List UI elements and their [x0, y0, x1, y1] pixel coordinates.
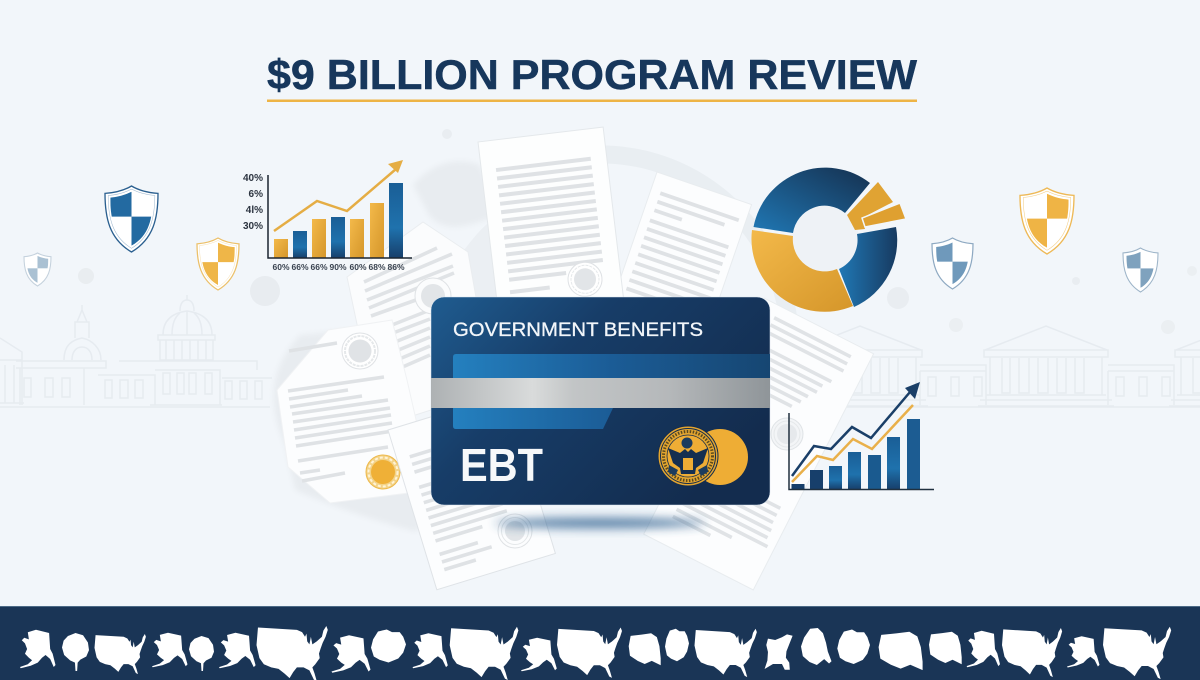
x axis labels: 60%	[349, 262, 367, 272]
donut segment: right blue	[839, 227, 897, 307]
y axis labels: 40%	[243, 173, 263, 184]
bar chart: left with rising arrow	[243, 160, 412, 272]
x axis labels: 68%	[368, 262, 386, 272]
donut segment: large gold	[751, 230, 853, 312]
right skyline with temples	[792, 326, 1200, 407]
shield: gold left	[197, 238, 239, 290]
y axis labels: 4l%	[246, 205, 263, 216]
card shadow	[495, 518, 705, 528]
document: left middle	[347, 222, 480, 420]
y axis labels	[243, 173, 263, 232]
shield: gold right	[1020, 188, 1074, 254]
title: $9 BILLION PROGRAM REVIEW	[267, 51, 917, 98]
grey stamp	[342, 333, 378, 369]
shield: small blue far right	[1123, 248, 1158, 292]
bars	[792, 419, 920, 490]
document: lower right	[644, 298, 874, 590]
donut hole	[791, 206, 859, 274]
axes	[789, 413, 934, 490]
card silver band	[431, 378, 770, 408]
shield: blue right	[932, 238, 973, 289]
bar chart: right with rising arrow	[789, 382, 934, 490]
EBT card	[431, 297, 770, 505]
card label EBT: EBT	[460, 439, 543, 491]
title underline	[267, 100, 917, 102]
bars	[274, 183, 403, 258]
document: top centre	[478, 127, 627, 346]
y axis labels: 30%	[243, 221, 263, 232]
donut wedge: gold exploded	[862, 203, 906, 227]
lower right grey stamp	[771, 418, 803, 450]
x axis labels: 90%	[329, 262, 347, 272]
footer band with state silhouettes	[0, 606, 1200, 680]
card heading: GOVERNMENT BENEFITS	[453, 319, 703, 341]
faint globe behind documents	[78, 129, 1197, 532]
x axis labels: 66%	[310, 262, 328, 272]
left skyline with capitol	[0, 295, 272, 407]
document: bottom centre	[388, 394, 555, 590]
x axis labels: 66%	[291, 262, 309, 272]
card blue stripe	[453, 354, 770, 429]
top document stamp	[566, 260, 604, 298]
x axis labels	[272, 262, 405, 272]
shield: pale left	[24, 253, 51, 286]
document: upper right	[559, 172, 752, 488]
gold stamp	[366, 455, 400, 489]
navy trend arrow	[792, 382, 920, 476]
donut segment: dark blue	[754, 168, 870, 233]
x axis labels: 60%	[272, 262, 290, 272]
state silhouettes	[20, 626, 1171, 680]
gold trend line	[792, 405, 913, 482]
card gold circle	[692, 429, 748, 485]
donut chart	[751, 168, 906, 312]
axes	[268, 175, 412, 258]
document: lower left with stamps	[277, 320, 432, 503]
trend arrow	[274, 160, 403, 231]
bottom centre stamp	[498, 514, 532, 548]
y axis labels: 6%	[249, 189, 263, 200]
shield: large blue left	[105, 186, 158, 252]
x axis labels: 86%	[387, 262, 405, 272]
donut wedge: gold inner	[847, 182, 893, 230]
government seal	[658, 426, 718, 486]
